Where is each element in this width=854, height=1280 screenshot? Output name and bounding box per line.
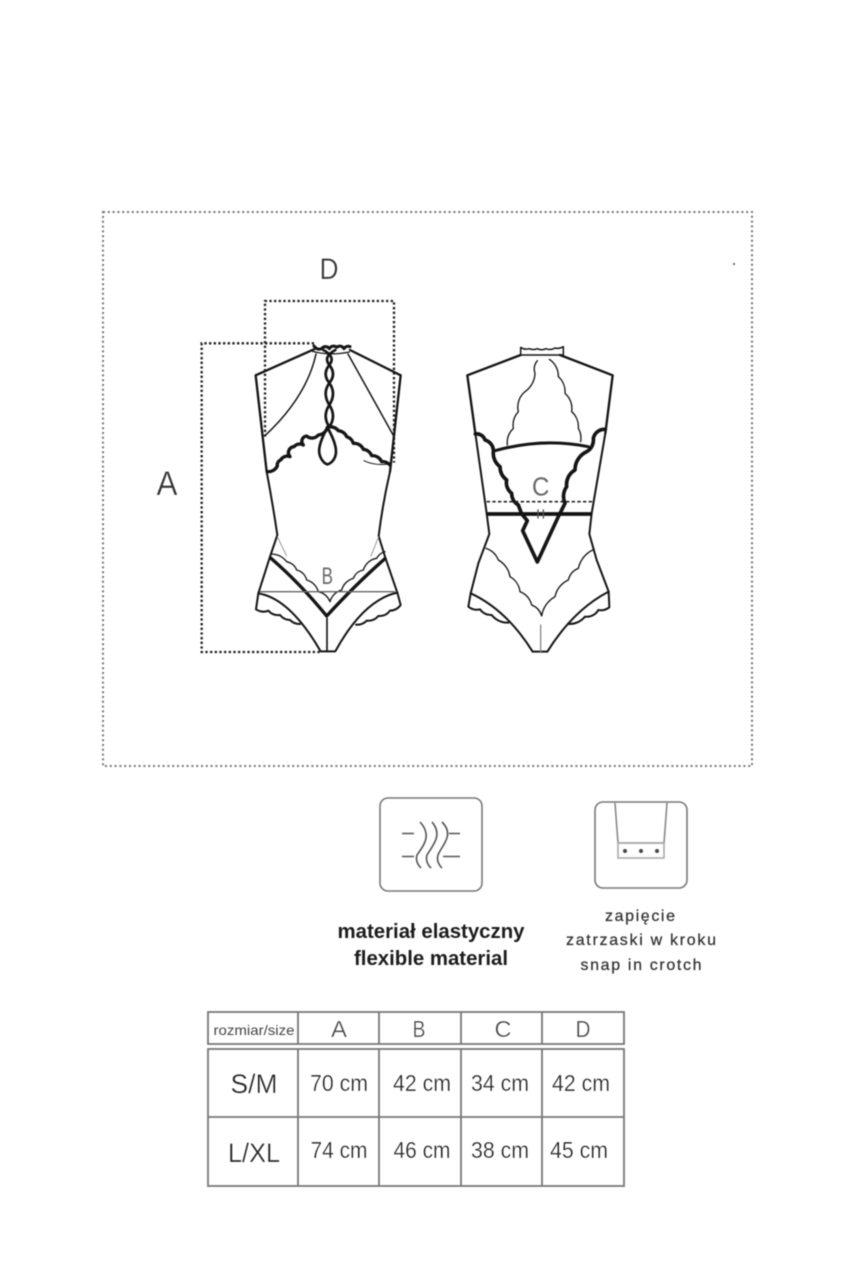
table header: D — [576, 1016, 590, 1042]
twisted front straps — [323, 350, 333, 427]
caption: snap in crotch: snap in crotch — [580, 957, 702, 974]
row L/XL: 74 cm — [310, 1137, 368, 1163]
label: B: B — [322, 563, 333, 590]
table header: A — [331, 1016, 348, 1042]
table header: rozmiar/size — [214, 1022, 295, 1038]
top arc strap — [495, 443, 588, 451]
keyhole loop — [319, 427, 336, 464]
caption: snap in crotch: zatrzaski w kroku — [566, 932, 716, 949]
panel: dotted diagram frame — [103, 212, 752, 766]
table grid — [208, 1012, 624, 1186]
row S/M: 34 cm — [471, 1070, 529, 1096]
label: A: A — [156, 465, 178, 503]
row S/M: 42 cm — [552, 1070, 610, 1096]
row S/M: S/M — [230, 1069, 278, 1099]
row L/XL: 45 cm — [550, 1137, 608, 1163]
scalloped V strap — [475, 429, 605, 562]
row L/XL: 46 cm — [394, 1137, 450, 1163]
caption: flexible material: flexible material — [354, 948, 508, 970]
label: D: D — [320, 253, 338, 286]
row L/XL: 38 cm — [471, 1137, 529, 1163]
icon: flexible material — [380, 798, 482, 891]
caption: flexible material: materiał elastyczny — [338, 921, 525, 943]
thick waist strap — [271, 558, 385, 616]
table header: C — [494, 1016, 512, 1042]
row S/M: 70 cm — [310, 1070, 368, 1096]
caption: flexible material — [338, 921, 525, 970]
label: C: C — [532, 472, 549, 502]
icon: crotch snap — [595, 802, 687, 888]
neck scallop band — [314, 346, 350, 349]
measure C dotted line — [487, 499, 593, 504]
diagram: bodysuit back — [467, 347, 613, 652]
caption: snap in crotch: zapięcie — [605, 908, 675, 925]
row S/M — [230, 1069, 610, 1099]
table header: B — [412, 1016, 426, 1042]
body outline — [467, 347, 613, 652]
row L/XL: L/XL — [228, 1138, 280, 1168]
caption: snap in crotch — [566, 908, 716, 974]
waist band — [487, 508, 592, 519]
body outline — [256, 349, 401, 651]
row S/M: 42 cm — [393, 1070, 451, 1096]
scalloped neckline — [267, 427, 390, 472]
measure D dotted outline — [265, 301, 394, 463]
table: size chart — [208, 1012, 624, 1186]
measure A dotted outline — [202, 343, 320, 652]
measure B line — [260, 590, 395, 594]
small speck — [733, 263, 735, 265]
table header — [214, 1016, 590, 1042]
lace waist line — [272, 552, 385, 602]
row L/XL — [228, 1137, 608, 1168]
diagram: bodysuit front — [202, 301, 401, 652]
